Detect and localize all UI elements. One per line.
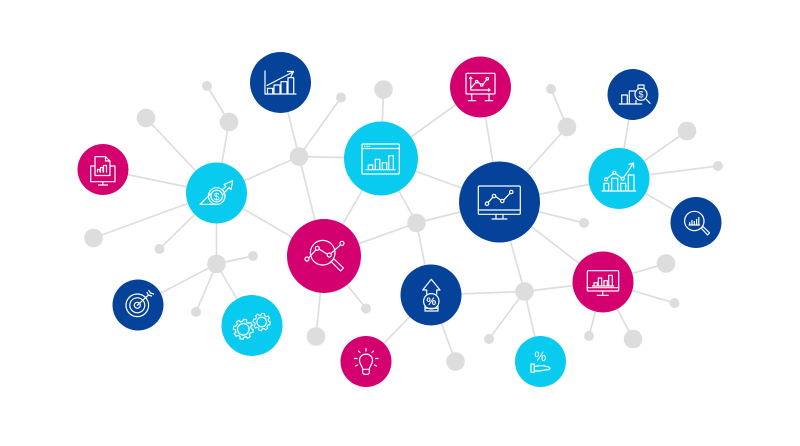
node: dollar coin with arrow: $ xyxy=(214,191,220,203)
node: hand holding percent: % xyxy=(534,349,546,364)
node: money bag magnifier xyxy=(608,69,658,120)
node: magnifier with bars xyxy=(670,197,722,248)
node: magnifier over line chart xyxy=(287,219,361,293)
node: document on monitor xyxy=(78,144,128,195)
grey connector nodes xyxy=(84,80,723,371)
node: target with dart xyxy=(112,280,164,330)
node: presentation board xyxy=(450,56,511,118)
node: dollar coin with arrow xyxy=(186,162,247,224)
node: monitor with line chart xyxy=(459,162,540,242)
node: light bulb xyxy=(340,336,392,387)
connecting lines xyxy=(94,82,718,362)
node: gears xyxy=(222,295,282,356)
node: rising bar chart xyxy=(250,52,311,113)
node: hand holding percent xyxy=(515,336,566,387)
node: browser window bar chart xyxy=(344,122,418,196)
node: percent with up arrow: % xyxy=(426,296,436,308)
node: money bag magnifier: $ xyxy=(638,90,644,100)
node: bar and line chart xyxy=(588,148,650,209)
node: percent with up arrow xyxy=(400,264,462,326)
node: monitor with bars xyxy=(572,252,634,312)
